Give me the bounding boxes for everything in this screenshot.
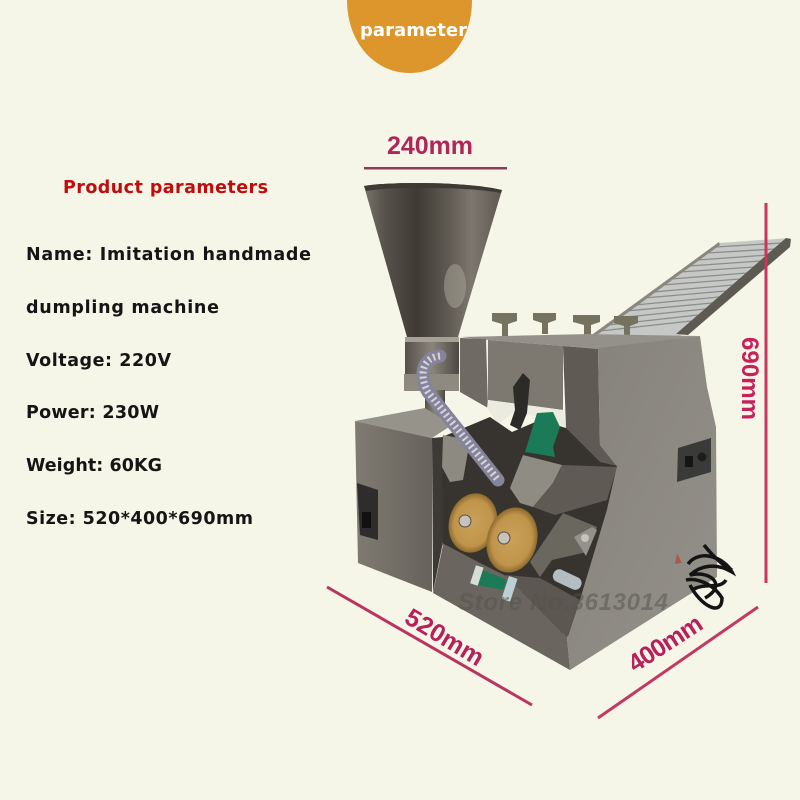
control panel left: [357, 483, 378, 540]
upper chute: [510, 455, 562, 507]
flexible hose: [423, 356, 498, 480]
dimension line: 520mm: 520mm: [400, 603, 489, 672]
conveyor ramp: [593, 238, 791, 336]
hopper: [364, 183, 502, 420]
right housing panel: [563, 346, 617, 470]
dimension line: 240mm: 240mm: [387, 132, 473, 160]
white gap below housing: [487, 400, 566, 428]
text block: product parameters: [26, 178, 311, 529]
left strip of housing: [460, 338, 488, 408]
black adjusting arm: [510, 373, 530, 430]
left guard: [442, 435, 470, 482]
watermark: Store No.3613014: [458, 589, 668, 616]
bracket and lever: [530, 513, 597, 592]
green belt upper: [525, 412, 560, 457]
right side panel: [567, 336, 717, 670]
dimension line: 690mm: [736, 203, 768, 583]
front housing panel: [488, 340, 563, 410]
dimension line: 520mm: [327, 587, 532, 705]
left base box: [355, 408, 452, 592]
warning mark: [675, 553, 682, 564]
dimension line: 400mm: 400mm: [623, 609, 708, 678]
machine illustration: [327, 132, 791, 718]
hose ribbing: [423, 356, 498, 480]
spec: weight: Weight: 60KG: [26, 456, 162, 476]
green belt lower: [477, 570, 507, 590]
main cabinet: [460, 334, 717, 670]
center mechanism: [433, 373, 617, 670]
badge: parameter: parameter: [360, 20, 467, 41]
top plate: [460, 334, 700, 349]
dimension line: 690mm: 690mm: [736, 337, 763, 420]
power cord: [686, 545, 732, 608]
lower front plate: [433, 543, 570, 670]
badge: parameter: [347, 0, 472, 73]
brass rollers: [442, 488, 545, 578]
spec: name continued: dumpling machine: [26, 298, 219, 318]
spec: voltage: Voltage: 220V: [26, 351, 171, 371]
adjustment knobs: [492, 313, 638, 342]
spec: size: Size: 520*400*690mm: [26, 509, 253, 529]
spec: power: Power: 230W: [26, 403, 159, 423]
dimension line: 400mm: [598, 607, 758, 718]
control panel right: [677, 438, 711, 482]
spec: name: Name: Imitation handmade: [26, 245, 311, 265]
heading: product parameters: Product parameters: [63, 178, 268, 198]
